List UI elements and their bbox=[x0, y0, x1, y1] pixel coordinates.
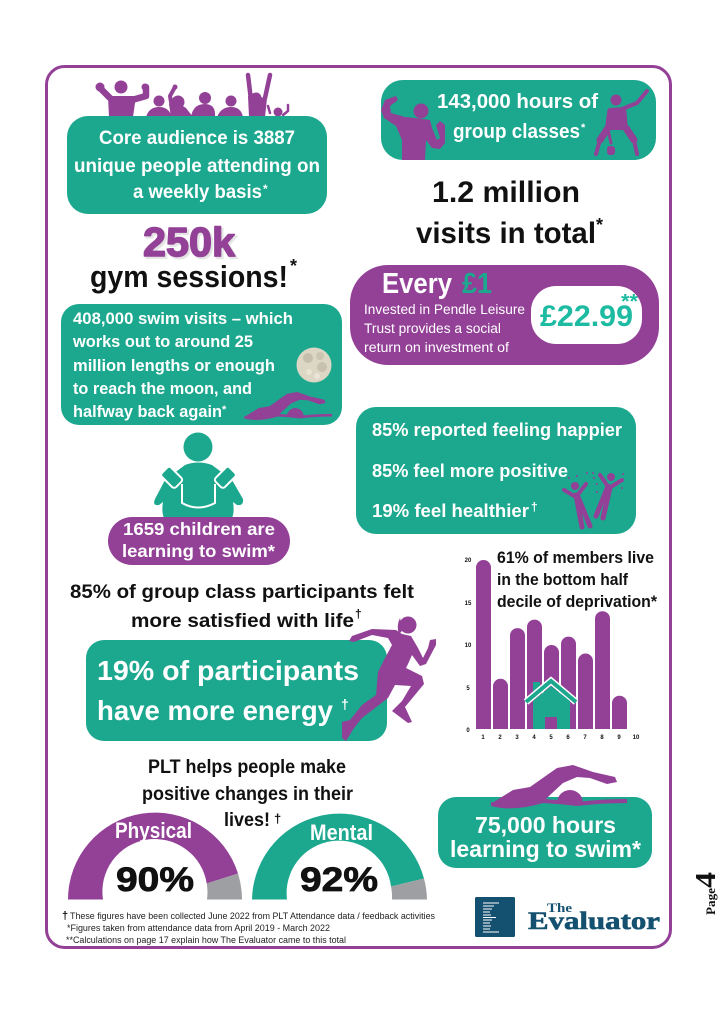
heading: 1.2 million visits: * bbox=[596, 215, 603, 235]
chart y axis labels bbox=[465, 558, 472, 734]
Every 1 pound heading: £1 bbox=[462, 268, 492, 300]
more energy text: † bbox=[341, 696, 349, 712]
wellbeing text bbox=[372, 420, 622, 521]
logo wordmark: The bbox=[547, 900, 572, 915]
core audience box bbox=[67, 116, 327, 214]
page number bbox=[691, 872, 722, 915]
swim visits text: halfway back again bbox=[73, 402, 222, 421]
icon: child with armbands bbox=[154, 432, 243, 525]
core audience text: a weekly basis bbox=[133, 182, 262, 203]
chart x axis labels: 5 bbox=[549, 735, 553, 741]
panel: social return bbox=[350, 265, 659, 365]
more energy text: 19% of participants bbox=[97, 655, 359, 686]
core audience text bbox=[74, 128, 320, 203]
learning to swim text bbox=[450, 812, 641, 862]
250k gym sessions heading: 250k bbox=[145, 221, 237, 267]
swim visits text: 408,000 swim visits – which bbox=[73, 309, 293, 328]
chart y axis labels: 10 bbox=[465, 643, 472, 649]
chart y axis labels: 5 bbox=[466, 686, 470, 692]
chart bars bbox=[476, 560, 627, 729]
icon: small swimmer bbox=[244, 392, 332, 420]
core audience text: unique people attending on bbox=[74, 156, 320, 177]
logo wordmark bbox=[528, 900, 660, 935]
page number: 4 bbox=[691, 872, 722, 888]
chart: physical gauge: Physical bbox=[115, 818, 192, 843]
icon: celebrating figures bbox=[564, 472, 624, 527]
logo: The Evaluator bbox=[475, 897, 660, 937]
children text: 1659 children are bbox=[123, 519, 275, 539]
heading: group class satisfaction bbox=[70, 581, 415, 632]
logo mark bbox=[475, 897, 515, 937]
icon: crowd silhouette bbox=[96, 75, 288, 117]
heading: 1.2 million visits: 1.2 million bbox=[432, 176, 580, 209]
chart: mental gauge: Mental bbox=[310, 820, 373, 845]
heading: 1.2 million visits bbox=[416, 176, 603, 250]
heading: 1.2 million visits: visits in total bbox=[416, 217, 596, 250]
group classes text: group classes bbox=[453, 121, 580, 143]
children pill bbox=[108, 517, 290, 565]
swim visits text bbox=[72, 309, 293, 421]
footnotes: *Figures taken from attendance data from April 2019 - March 2022 bbox=[67, 923, 330, 933]
panel: page border bbox=[46, 66, 670, 948]
chart x axis labels: 10 bbox=[633, 735, 640, 741]
core audience text: * bbox=[263, 182, 268, 196]
heading: group class satisfaction: more satisfied with life bbox=[131, 610, 354, 632]
chart x axis labels: 9 bbox=[617, 735, 621, 741]
logo wordmark: Evaluator bbox=[528, 908, 660, 935]
chart caption: decile of deprivation* bbox=[497, 592, 657, 611]
chart: mental gauge: 92% bbox=[300, 861, 378, 899]
social return text: Trust provides a social bbox=[364, 321, 501, 336]
icon: house bbox=[526, 681, 576, 729]
panel: wellbeing bbox=[356, 407, 636, 534]
chart y axis labels: 0 bbox=[466, 728, 470, 734]
swim visits text: to reach the moon, and bbox=[73, 379, 252, 398]
value pill: £22.99 bbox=[540, 300, 633, 333]
icon: swimmer bbox=[491, 765, 627, 808]
chart x axis labels: 6 bbox=[566, 735, 570, 741]
chart y axis labels: 20 bbox=[465, 558, 472, 564]
children text bbox=[122, 519, 275, 561]
chart caption: 61% of members live bbox=[497, 548, 654, 567]
value pill bbox=[531, 286, 642, 344]
250k gym sessions heading: * bbox=[290, 256, 297, 276]
chart y axis labels: 15 bbox=[465, 601, 472, 607]
core audience text: Core audience is 3887 bbox=[99, 128, 295, 149]
chart x axis labels: 7 bbox=[583, 735, 587, 741]
heading: positive changes bbox=[142, 757, 354, 831]
panel: group classes bbox=[381, 80, 656, 160]
heading: positive changes: positive changes in their bbox=[142, 784, 354, 805]
group classes text: 143,000 hours of bbox=[437, 91, 598, 113]
heading: group class satisfaction: 85% of group class participants felt bbox=[70, 581, 415, 603]
panel: core audience bbox=[67, 75, 327, 214]
footnotes: These figures have been collected June 2022 from PLT Attendance data / feedback activities bbox=[70, 911, 435, 921]
icon: runner bbox=[342, 616, 436, 741]
wellbeing text: 85% reported feeling happier bbox=[372, 420, 622, 440]
heading: positive changes: lives! bbox=[224, 810, 270, 831]
panel: learning to swim hours bbox=[438, 765, 652, 868]
swim visits text: million lengths or enough bbox=[73, 356, 275, 375]
chart: mental gauge bbox=[252, 814, 427, 900]
heading: positive changes: † bbox=[274, 811, 281, 826]
learning to swim text: learning to swim* bbox=[450, 836, 641, 862]
chart x axis labels: 3 bbox=[515, 735, 519, 741]
social return text: Invested in Pendle Leisure bbox=[364, 302, 525, 317]
panel: children learning to swim bbox=[108, 432, 290, 565]
Every 1 pound heading: Every bbox=[382, 268, 452, 300]
more energy text bbox=[97, 655, 359, 726]
footnotes: **Calculations on page 17 explain how The Evaluator came to this total bbox=[66, 935, 346, 945]
chart caption: in the bottom half bbox=[497, 570, 628, 589]
value pill: ** bbox=[621, 291, 638, 313]
chart x axis labels: 8 bbox=[600, 735, 604, 741]
children text: learning to swim* bbox=[122, 541, 275, 561]
icon: bodybuilder bbox=[381, 96, 445, 160]
group classes text bbox=[437, 91, 598, 143]
250k gym sessions heading bbox=[90, 219, 297, 294]
chart: physical gauge: 90% bbox=[116, 861, 194, 899]
swim visits text: works out to around 25 bbox=[72, 332, 253, 351]
chart: physical gauge bbox=[68, 813, 242, 900]
250k gym sessions heading: 250k bbox=[143, 219, 235, 265]
page number: Page bbox=[703, 888, 718, 915]
chart x axis labels: 4 bbox=[532, 735, 536, 741]
bar chart: deprivation decile bbox=[465, 548, 657, 741]
icon: kettlebell squat bbox=[596, 91, 647, 155]
icon: moon bbox=[296, 348, 332, 382]
footnotes: † bbox=[62, 910, 68, 922]
wellbeing text: † bbox=[531, 500, 538, 514]
heading: positive changes: PLT helps people make bbox=[148, 757, 346, 778]
chart x axis labels: 2 bbox=[498, 735, 502, 741]
more energy text: have more energy bbox=[97, 695, 333, 726]
panel: more energy bbox=[86, 616, 436, 741]
group classes text: * bbox=[581, 122, 586, 134]
chart caption bbox=[497, 548, 657, 611]
chart x axis labels: 1 bbox=[481, 735, 485, 741]
panel: swim visits bbox=[61, 304, 342, 425]
chart x axis labels bbox=[481, 735, 640, 741]
250k gym sessions heading: gym sessions! bbox=[90, 259, 288, 294]
swim visits text: * bbox=[222, 404, 227, 416]
learning to swim text: 75,000 hours bbox=[475, 812, 616, 838]
social return text: return on investment of bbox=[364, 340, 509, 355]
heading: group class satisfaction: † bbox=[355, 607, 362, 621]
footnotes bbox=[62, 910, 435, 945]
wellbeing text: 19% feel healthier bbox=[372, 501, 529, 521]
wellbeing text: 85% feel more positive bbox=[372, 461, 568, 481]
social return text bbox=[364, 302, 525, 355]
